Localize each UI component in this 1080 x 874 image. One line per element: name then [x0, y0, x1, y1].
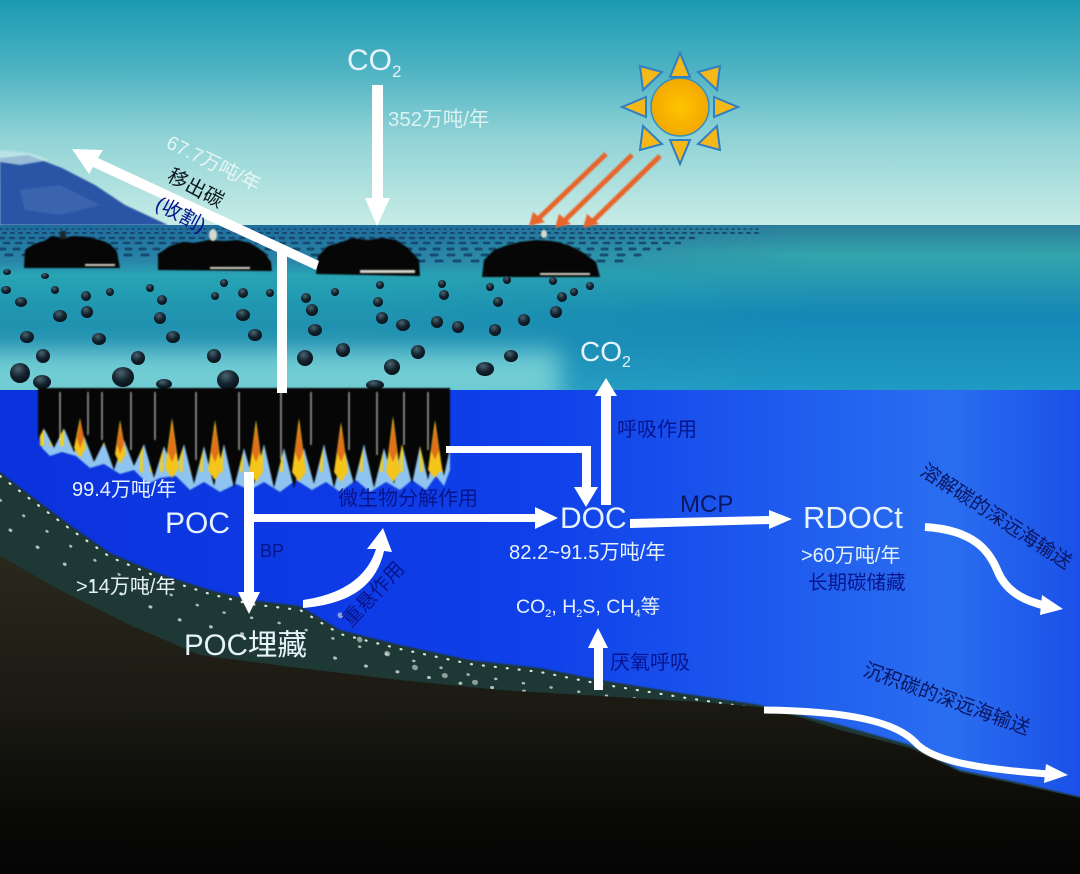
label: sediment carbon transport: 沉积碳的深远海输送 — [860, 659, 1033, 740]
arrow: resuspension — [303, 528, 392, 608]
harvest boats with seaweed piles — [24, 229, 600, 277]
label: RDOCt: RDOCt — [803, 500, 903, 535]
arrow: atmospheric CO2 into sea — [365, 85, 390, 226]
seaweed pale tips — [38, 430, 450, 492]
boat and figure details — [85, 229, 590, 275]
blade highlights — [60, 392, 428, 460]
seaweed pile 4 — [482, 240, 600, 277]
label: MCP: MCP — [680, 491, 733, 518]
label: POC: POC — [165, 507, 230, 540]
label: dissolved carbon transport: 溶解碳的深远海输送 — [916, 460, 1075, 574]
label: BP: BP — [260, 541, 284, 561]
label: CO2 atmosphere: CO — [347, 44, 392, 77]
sun with rays — [622, 53, 738, 164]
label: DOC: DOC — [560, 502, 627, 535]
seaweed pile 3 — [316, 238, 420, 276]
sediment pebbles — [0, 476, 830, 735]
label: CO2 respiration: CO — [580, 336, 622, 367]
label: harvest flux: 67.7万吨/年 — [163, 132, 264, 196]
arrow: POC to DOC decomposition — [252, 507, 558, 529]
label: sediment gases: 2 — [576, 608, 582, 620]
label: respiration: 呼吸作用 — [617, 418, 697, 441]
seabed sediment layer — [0, 472, 1080, 874]
seaweed curtain — [38, 388, 450, 492]
label: microbial decomposition: 微生物分解作用 — [338, 487, 478, 510]
background: distant mountain — [0, 150, 168, 225]
label: CO2 flux: 352万吨/年 — [388, 108, 489, 131]
deep water — [0, 390, 1080, 800]
label: POC flux: 99.4万吨/年 — [72, 478, 176, 501]
distant rows of floats — [0, 229, 760, 261]
sun disc — [651, 78, 709, 136]
label: sediment gases: 等 — [641, 596, 660, 618]
deep seabed — [0, 550, 1080, 874]
label: sediment gases: 4 — [634, 608, 641, 620]
sunlight arrows — [529, 154, 660, 228]
label: removed carbon: 移出碳 — [164, 164, 227, 213]
sun rays — [622, 53, 738, 164]
label: burial flux: >14万吨/年 — [76, 575, 175, 598]
arrow: dissolved carbon deep-sea transport — [925, 527, 1063, 615]
arrow: seaweed to DOC — [446, 446, 598, 507]
label: DOC flux: 82.2~91.5万吨/年 — [509, 541, 666, 564]
seaweed blades — [38, 388, 450, 488]
arrow: harvest removal — [72, 149, 319, 270]
seaweed pile 1 — [24, 236, 120, 268]
seaweed pile 2 — [158, 240, 272, 271]
arrow: MCP to RDOCt — [630, 510, 792, 529]
label: sediment gases: S, CH — [582, 596, 634, 618]
harvest vertical bar — [277, 250, 287, 393]
label: sediment gases: , H — [551, 596, 576, 618]
label: resuspension: 重悬作用 — [338, 557, 409, 631]
label: long-term storage: 长期碳储藏 — [808, 572, 906, 594]
background: sea surface — [0, 225, 1080, 408]
golden flames — [74, 416, 442, 482]
arrow: sediment carbon deep-sea transport — [764, 710, 1068, 783]
mooring floats — [1, 269, 594, 390]
label: CO2 respiration: 2 — [622, 354, 631, 371]
label: RDOCt flux: >60万吨/年 — [801, 544, 900, 567]
label: anaerobic respiration: 厌氧呼吸 — [610, 651, 690, 674]
arrow: POC burial — [238, 472, 260, 614]
orange flame cores — [77, 420, 439, 462]
arrow: anaerobic respiration — [588, 628, 608, 690]
background: sky — [0, 0, 1080, 226]
label: sediment gases: CO — [516, 596, 545, 618]
seaweed yellow slivers — [40, 436, 450, 458]
label: sediment gases: 2 — [545, 608, 551, 620]
arrow: DOC respiration to CO2 — [595, 378, 617, 505]
label: POC burial: POC埋藏 — [184, 629, 307, 662]
label: harvest: (收割) — [152, 192, 210, 237]
label: CO2 atmosphere: 2 — [392, 62, 401, 81]
